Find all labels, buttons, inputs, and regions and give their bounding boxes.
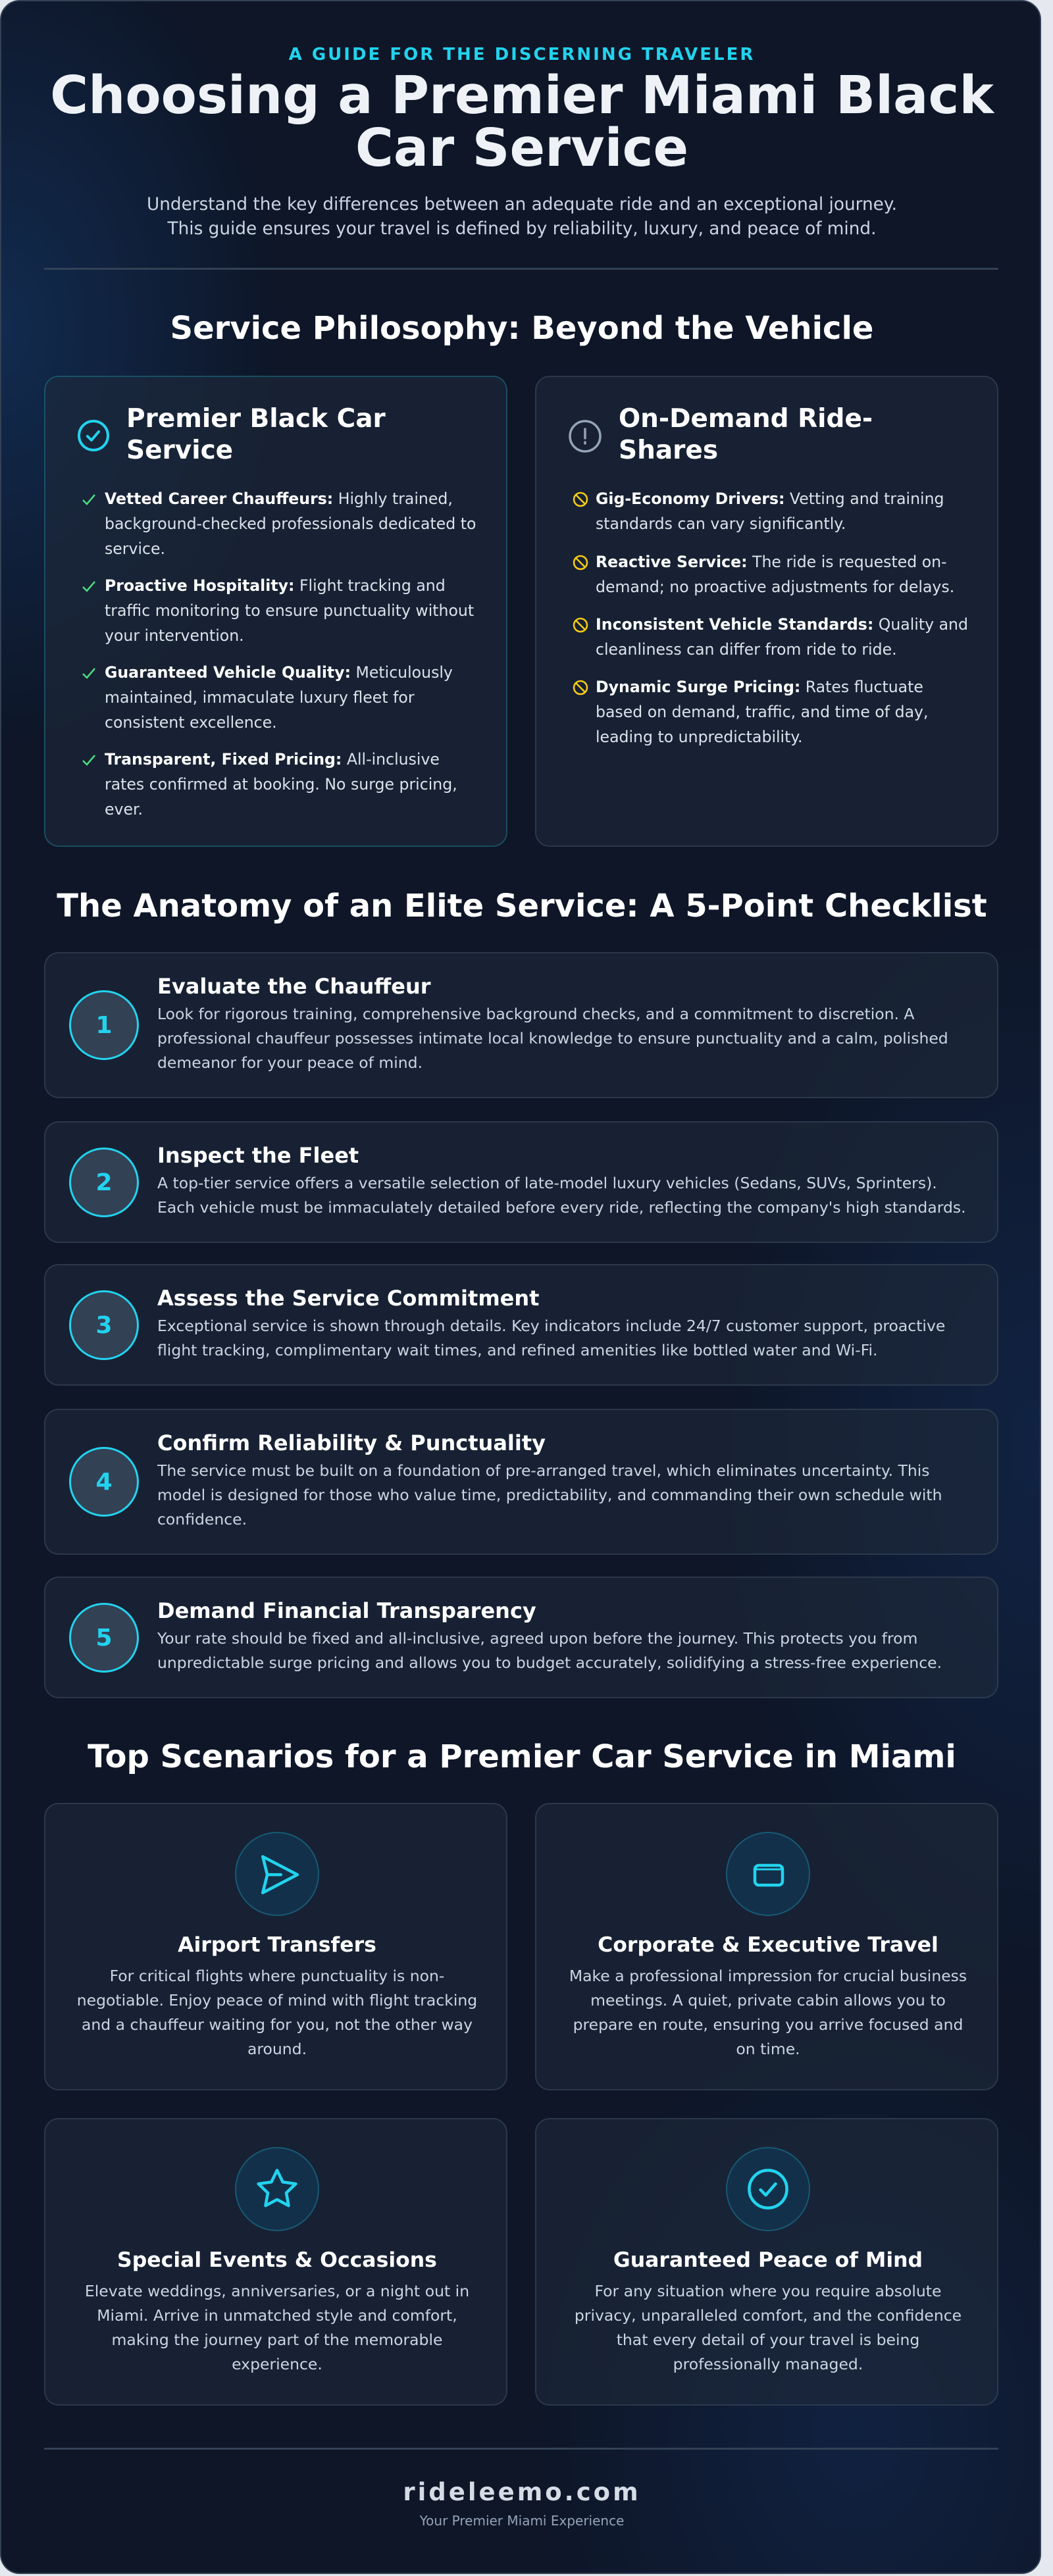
icon: send [235, 1832, 319, 1916]
panel: on-demand ride-shares: Gig-Economy Drivers: Vetting and training standards can vary significantly. [596, 490, 944, 533]
panel title [619, 404, 873, 465]
scenario: special events: Special Events & Occasions [117, 2248, 437, 2272]
panel: on-demand ride-shares: Reactive Service: The ride is requested on-demand; no proactive adjustments for delays. [596, 553, 954, 596]
panel title: On-Demand Ride- [619, 404, 873, 434]
intro text [147, 195, 897, 239]
heading: scenarios: Top Scenarios for a Premier Car Service in Miami [88, 1738, 956, 1775]
checklist item 2: 2 [95, 1169, 113, 1196]
scenario: corporate: Corporate & Executive Travel [598, 1933, 938, 1957]
panel: on-demand ride-shares [535, 376, 998, 847]
footer tagline: Your Premier Miami Experience [420, 2513, 624, 2529]
checklist item 2: A top-tier service offers a versatile selection of late-model luxury vehicles (Sedans, SUVs, Sprinters). [157, 1174, 937, 1192]
panel title: Premier Black Car [126, 404, 386, 434]
panel title: Service [126, 436, 233, 465]
scenario: airport transfers: Airport Transfers [178, 1933, 376, 1957]
intro text: Understand the key differences between an adequate ride and an exceptional journey. [147, 195, 897, 215]
title: Choosing a Premier Miami Black Car Service [50, 65, 994, 178]
footer brand: rideleemo.com [403, 2478, 641, 2506]
checklist item 3: 3 [95, 1312, 113, 1338]
scenario: special events [44, 2118, 507, 2406]
checklist item 4: model is designed for those who value time, predictability, and commanding their own schedule with [157, 1486, 942, 1504]
checklist item 4: The service must be built on a foundation of pre-arranged travel, which eliminates uncertainty. This [157, 1461, 930, 1480]
scenario: special events: Elevate weddings, anniversaries, or a night out in Miami. Arrive in unmatched style and comfort, making the journey part of the memorable experience. [85, 2282, 469, 2373]
intro text: This guide ensures your travel is defined by reliability, luxury, and peace of mind. [168, 219, 876, 239]
panel: premier black car service [44, 376, 507, 847]
checklist item 1: 1 [95, 1012, 113, 1038]
checklist item 4 [44, 1409, 998, 1555]
panel: on-demand ride-shares: Inconsistent Vehicle Standards: Quality and cleanliness can differ from ride to ride. [596, 615, 968, 659]
checklist item 2: Each vehicle must be immaculately detailed before every ride, reflecting the company's high standards. [157, 1198, 966, 1217]
scenario: peace of mind: Guaranteed Peace of Mind [613, 2248, 923, 2272]
checklist item 3: Exceptional service is shown through details. Key indicators include 24/7 customer support, proactive flight tracking, complimentary wait times, and refined amenities like bottled water and Wi-Fi. [157, 1317, 945, 1359]
checklist item 5 [44, 1577, 998, 1698]
bullet list [573, 490, 968, 746]
checklist item 3: Assess the Service Commitment [157, 1286, 539, 1311]
heading: checklist: The Anatomy of an Elite Service: A 5-Point Checklist [57, 888, 987, 924]
panel: premier black car service: Proactive Hospitality: Flight tracking and traffic monitoring to ensure punctuality without your intervention. [105, 576, 474, 645]
icon: check circle [78, 420, 109, 451]
eyebrow: A GUIDE FOR THE DISCERNING TRAVELER [289, 45, 755, 64]
heading: service philosophy: Service Philosophy: Beyond the Vehicle [170, 310, 873, 347]
panel: premier black car service: Vetted Career Chauffeurs: Highly trained, background-checked professionals dedicated to service. [105, 490, 476, 558]
checklist item 1: Look for rigorous training, comprehensive background checks, and a commitment to discretion. A professional chauffeur possesses intimate local knowledge to ensure punctuality and a calm, polished demeanor for your peace of mind. [157, 1005, 948, 1072]
checklist item 3 [44, 1264, 998, 1386]
icon: briefcase [726, 1832, 810, 1916]
icon: alert circle [569, 420, 602, 453]
panel title: Shares [619, 436, 718, 465]
panel: premier black car service: Transparent, Fixed Pricing: All-inclusive rates confirmed at booking. No surge pricing, ever. [105, 750, 457, 819]
checklist item 4: Confirm Reliability & Punctuality [157, 1430, 546, 1455]
checklist item 2 [44, 1121, 998, 1243]
checklist item 4: 4 [95, 1469, 113, 1495]
checklist item 5: Your rate should be fixed and all-inclusive, agreed upon before the journey. This protects you from unpredictable surge pricing and allows you to budget accurately, solidifying a stress-free experience. [157, 1629, 942, 1672]
scenario: peace of mind [535, 2118, 998, 2406]
scenario: corporate: Make a professional impression for crucial business meetings. A quiet, private cabin allows you to prepare en route, ensuring you arrive focused and on time. [569, 1967, 967, 2058]
scenario: peace of mind: For any situation where you require absolute privacy, unparalleled comfort, and the confidence that every detail of your travel is being professionally managed. [575, 2282, 962, 2373]
panel title [126, 404, 386, 465]
panel: premier black car service: Guaranteed Vehicle Quality: Meticulously maintained, immaculate luxury fleet for consistent excellence. [105, 663, 453, 732]
checklist item 5: 5 [95, 1624, 113, 1652]
checklist item 1: Evaluate the Chauffeur [157, 974, 431, 999]
icon: check circle [726, 2147, 810, 2231]
icon: star [235, 2147, 319, 2231]
panel: on-demand ride-shares: Dynamic Surge Pricing: Rates fluctuate based on demand, traffic, and time of day, leading to unpredictability. [596, 678, 928, 746]
checklist item 2: Inspect the Fleet [157, 1143, 359, 1168]
scenario: corporate [535, 1803, 998, 2090]
scenario: airport transfers [44, 1803, 507, 2090]
scenario: airport transfers: For critical flights where punctuality is non-negotiable. Enjoy peace of mind with flight tracking and a chauffeur waiting for you, not the other way around. [77, 1967, 477, 2058]
bullet list [82, 490, 476, 819]
checklist item 1 [44, 952, 998, 1098]
checklist item 5: Demand Financial Transparency [157, 1598, 536, 1623]
checklist item 4: confidence. [157, 1510, 247, 1528]
